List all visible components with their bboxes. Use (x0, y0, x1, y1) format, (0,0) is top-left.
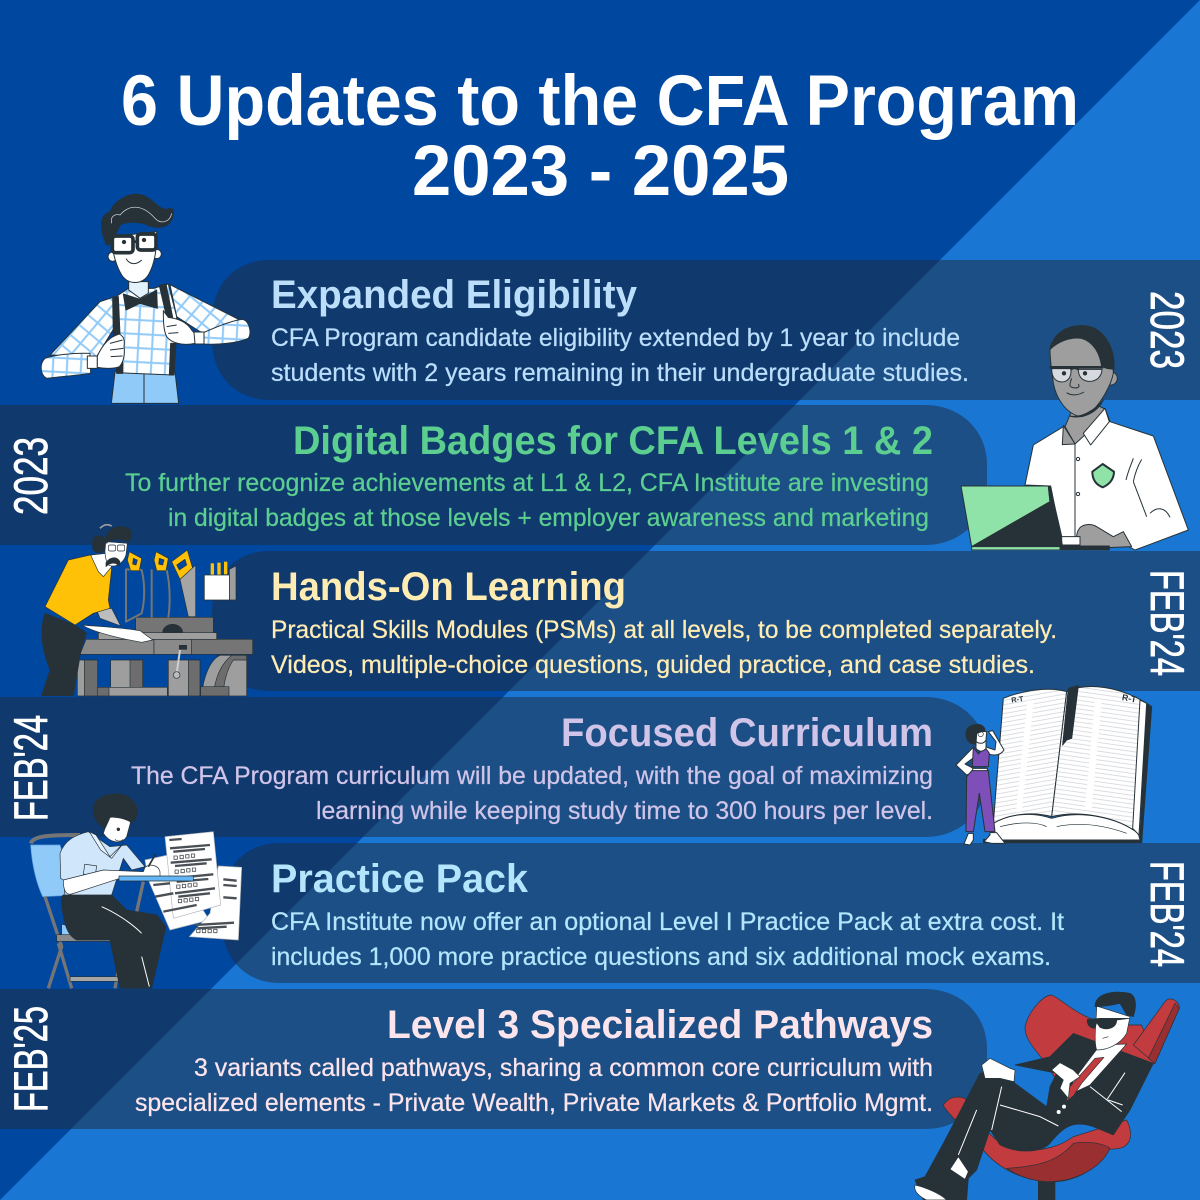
body text: learning while keeping study time to 300 hours per level. (316, 797, 933, 825)
body text: in digital badges at those levels + employer awareness and marketing (168, 504, 929, 532)
title (121, 62, 1079, 211)
band (222, 843, 1200, 983)
body text: The CFA Program curriculum will be updated, with the goal of maximizing (131, 762, 933, 790)
body text: Videos, multiple-choice questions, guided practice, and case studies. (271, 651, 1035, 679)
body text: Practical Skills Modules (PSMs) at all levels, to be completed separately. (271, 616, 1057, 644)
band (0, 697, 987, 837)
title: 2023 - 2025 (412, 132, 789, 211)
body text: CFA Institute now offer an optional Level I Practice Pack at extra cost. It (271, 908, 1064, 936)
band (212, 551, 1200, 691)
label: R-T (1011, 694, 1025, 705)
illustration: student completing exam papers (31, 794, 242, 988)
heading: Digital Badges for CFA Levels 1 & 2 (293, 419, 933, 463)
label: R-T (1121, 692, 1138, 705)
body text (125, 469, 929, 532)
body text (131, 762, 933, 825)
body text (271, 324, 969, 387)
title: 6 Updates to the CFA Program (121, 62, 1079, 141)
panel: hands-on learning (212, 551, 1200, 691)
illustration: man at laptop with shield badge (961, 326, 1188, 550)
body text: specialized elements - Private Wealth, Private Markets & Portfolio Mgmt. (135, 1089, 933, 1117)
date label: FEB'24 (1141, 861, 1194, 967)
heading: Expanded Eligibility (271, 273, 638, 317)
date label: FEB'24 (1141, 570, 1194, 676)
heading: Hands-On Learning (271, 565, 626, 609)
panel: digital badges (0, 405, 987, 545)
body text: To further recognize achievements at L1 & L2, CFA Institute are investing (125, 469, 929, 497)
illustration: woman with giant open book (956, 686, 1152, 845)
illustration: man with bow tie and suspenders (41, 194, 250, 403)
illustration: man in suit on red armchair (915, 992, 1179, 1200)
body text: CFA Program candidate eligibility extended by 1 year to include (271, 324, 960, 352)
band (212, 260, 1200, 400)
panel: level 3 pathways (0, 989, 987, 1129)
date label: FEB'24 (4, 715, 57, 821)
heading: Level 3 Specialized Pathways (387, 1003, 933, 1047)
date label: 2023 (4, 437, 57, 515)
body text (271, 908, 1064, 971)
illustration: carpenter at workbench (42, 525, 253, 696)
body text (135, 1054, 933, 1117)
date label: FEB'25 (4, 1006, 57, 1112)
body text: students with 2 years remaining in their undergraduate studies. (271, 359, 969, 387)
band (0, 405, 987, 545)
body text: includes 1,000 more practice questions and six additional mock exams. (271, 943, 1051, 971)
panel: practice pack (222, 843, 1200, 983)
heading: Focused Curriculum (561, 711, 933, 755)
body text (271, 616, 1057, 679)
heading: Practice Pack (271, 857, 529, 901)
body text: 3 variants called pathways, sharing a common core curriculum with (194, 1054, 933, 1082)
panel: expanded eligibility (212, 260, 1200, 400)
date label: 2023 (1141, 291, 1194, 369)
panel: focused curriculum (0, 697, 987, 837)
band (0, 989, 987, 1129)
